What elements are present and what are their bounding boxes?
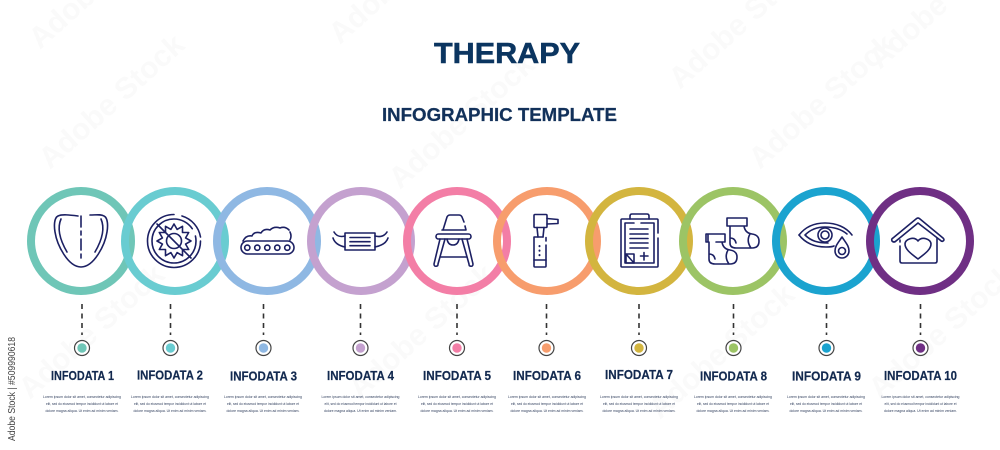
text block (508, 394, 586, 413)
text block: dolore magna aliqua. Ut enim ad minim veniam. (46, 408, 118, 413)
text block: elit, sed do eiusmod tempor incididunt ut labore et (697, 401, 770, 406)
heading: INFODATA 5 (423, 368, 491, 383)
heading: INFODATA 8 (700, 368, 767, 384)
heading: INFODATA 3 (230, 368, 297, 384)
heading: INFODATA 2 (137, 368, 203, 382)
subtitle: INFOGRAPHIC TEMPLATE (382, 105, 617, 125)
panel: infodata 7 (589, 191, 689, 413)
panel: infodata 4 (311, 191, 411, 413)
icon: house with heart (892, 218, 944, 263)
watermark pattern: Adobe Stock (743, 28, 901, 175)
icon: high chair (434, 215, 473, 266)
icon: medical clipboard (621, 214, 658, 267)
heading: INFODATA 10 (884, 368, 957, 383)
connector (826, 304, 828, 335)
text block: dolore magna aliqua. Ut enim ad minim veniam. (226, 408, 300, 413)
heading: INFODATA 4 (327, 368, 395, 383)
marker (726, 340, 741, 356)
text block (224, 394, 302, 413)
connector (732, 304, 734, 335)
icon: crying eye (799, 223, 852, 258)
text block: Lorem ipsum dolor sit amet, consectetur adipiscing (224, 394, 302, 399)
text block: elit, sed do eiusmod tempor incididunt ut labore et (884, 401, 957, 406)
connector (262, 304, 264, 335)
panel: infodata 3 (217, 191, 317, 413)
marker (632, 340, 646, 356)
connector (546, 304, 548, 335)
text block: Lorem ipsum dolor sit amet, consectetur adipiscing (882, 394, 960, 399)
marker (74, 340, 90, 356)
text block: dolore magna aliqua. Ut enim ad minim veniam. (134, 408, 206, 413)
text block: dolore magna aliqua. Ut enim ad minim veniam. (420, 408, 494, 413)
text block (418, 394, 496, 413)
heading: INFODATA 6 (513, 368, 581, 383)
text block: elit, sed do eiusmod tempor incididunt ut labore et (603, 401, 676, 406)
panel: infodata 5 (407, 191, 507, 413)
connector (920, 304, 922, 335)
text block: Lorem ipsum dolor sit amet, consectetur adipiscing (322, 394, 400, 399)
watermark pattern: Adobe Stock (343, 258, 501, 405)
heading: INFODATA 1 (51, 368, 114, 383)
text block: elit, sed do eiusmod tempor incididunt ut labore et (134, 401, 207, 406)
text block: Lorem ipsum dolor sit amet, consectetur adipiscing (131, 394, 209, 399)
heading: INFODATA 9 (792, 368, 861, 384)
text block: dolore magna aliqua. Ut enim ad minim veniam. (696, 408, 770, 413)
icon: face mask (333, 232, 388, 250)
connector (81, 304, 83, 335)
text block: dolore magna aliqua. Ut enim ad minim veniam. (884, 408, 957, 413)
text block (322, 394, 400, 413)
text block: elit, sed do eiusmod tempor incididunt ut labore et (324, 401, 397, 406)
text block: elit, sed do eiusmod tempor incididunt ut labore et (790, 401, 863, 406)
panel: infodata 2 (125, 191, 225, 413)
panel: infodata 10 (870, 191, 970, 413)
text block: Lorem ipsum dolor sit amet, consectetur adipiscing (600, 394, 678, 399)
watermark pattern: Adobe Stock (13, 258, 171, 405)
text block: Lorem ipsum dolor sit amet, consectetur adipiscing (43, 394, 121, 399)
text block (882, 394, 960, 413)
watermark pattern: Adobe Stock (643, 278, 801, 425)
text block (787, 394, 865, 413)
panel: infodata 6 (497, 191, 597, 413)
heading: INFODATA 7 (605, 367, 673, 382)
text block: dolore magna aliqua. Ut enim ad minim veniam. (510, 408, 584, 413)
text block: Lorem ipsum dolor sit amet, consectetur adipiscing (508, 394, 586, 399)
connector (638, 304, 640, 335)
watermark pattern: Adobe Stock (33, 28, 191, 175)
text block: Lorem ipsum dolor sit amet, consectetur adipiscing (694, 394, 772, 399)
panel: infodata 8 (683, 191, 783, 413)
marker (353, 340, 368, 356)
text block (43, 394, 121, 413)
connector (360, 304, 362, 335)
text block: dolore magna aliqua. Ut enim ad minim veniam. (602, 408, 676, 413)
text block: elit, sed do eiusmod tempor incididunt ut labore et (227, 401, 300, 406)
text block (694, 394, 772, 413)
icon: foam roller (241, 227, 294, 254)
marker (256, 340, 271, 356)
text block: elit, sed do eiusmod tempor incididunt ut labore et (421, 401, 494, 406)
icon: otoscope (534, 214, 558, 267)
stock image credit: Adobe Stock | #509990618 (6, 337, 18, 441)
marker (913, 340, 928, 356)
marker (163, 340, 178, 356)
text block: elit, sed do eiusmod tempor incididunt ut labore et (46, 401, 119, 406)
icon: socks (706, 218, 759, 264)
text block: Lorem ipsum dolor sit amet, consectetur adipiscing (787, 394, 865, 399)
icon: virus blocked (148, 214, 200, 268)
text block (131, 394, 209, 413)
marker (539, 340, 554, 356)
connector (456, 304, 458, 335)
text block: dolore magna aliqua. Ut enim ad minim veniam. (790, 408, 862, 413)
watermark pattern: Adobe Stock (383, 48, 541, 195)
text block: Lorem ipsum dolor sit amet, consectetur adipiscing (418, 394, 496, 399)
marker (819, 340, 834, 356)
panel: infodata 1 (31, 191, 131, 413)
text block: elit, sed do eiusmod tempor incididunt ut labore et (511, 401, 584, 406)
panel: infodata 9 (776, 191, 876, 413)
marker (450, 340, 464, 356)
title: THERAPY (434, 38, 580, 70)
connector (170, 304, 172, 335)
text block (600, 394, 678, 413)
text block: dolore magna aliqua. Ut enim ad minim veniam. (324, 408, 397, 413)
icon: tongue (54, 215, 108, 267)
